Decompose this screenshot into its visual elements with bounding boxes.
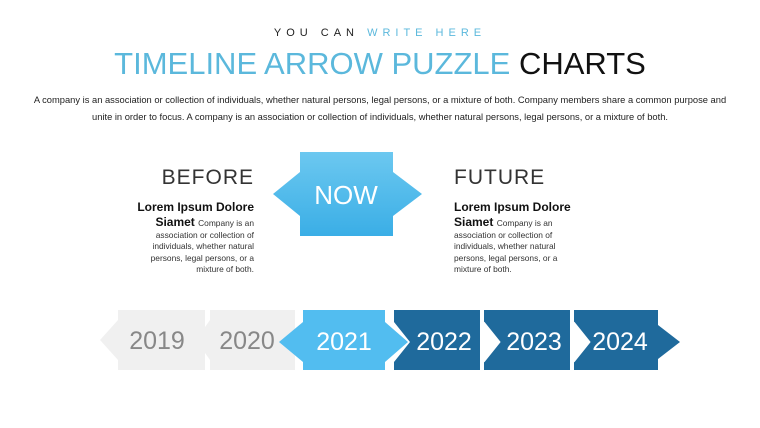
before block: Lorem Ipsum Dolore: [137, 200, 254, 214]
intro paragraph: unite in order to focus. A company is an association or collection of individuals, whether natural persons, legal persons, or a mixture of both.: [92, 112, 668, 122]
title: TIMELINE ARROW PUZZLE CHARTS: [114, 46, 646, 81]
future block: persons, legal persons, or a: [454, 253, 557, 263]
2019: 2019: [129, 327, 185, 355]
future block: association or collection of: [454, 230, 552, 240]
subtitle: YOU CAN WRITE HERE: [274, 27, 486, 39]
intro paragraph: [34, 95, 726, 122]
2020: 2020: [219, 327, 275, 355]
2021: [279, 310, 408, 370]
future block: mixture of both.: [454, 264, 512, 274]
before block: [137, 166, 254, 274]
future block: FUTURE: [454, 166, 545, 189]
2020: [196, 310, 295, 370]
2024: 2024: [592, 328, 648, 356]
2023: [484, 310, 570, 370]
2019: [100, 310, 205, 370]
before block: association or collection of: [156, 230, 254, 240]
future block: [454, 166, 571, 274]
now arrow: NOW: [314, 180, 378, 210]
before block: BEFORE: [162, 166, 254, 189]
2021: 2021: [316, 328, 372, 356]
2022: [394, 310, 480, 370]
intro paragraph: A company is an association or collection of individuals, whether natural persons, legal persons, or a mixture of both. Company members share a common purpose and: [34, 95, 726, 105]
before block: persons, legal persons, or a: [151, 253, 254, 263]
before block: mixture of both.: [196, 264, 254, 274]
before block: Siamet Company is an: [155, 215, 254, 229]
before block: individuals, whether natural: [152, 241, 254, 251]
future block: Siamet Company is an: [454, 215, 553, 229]
future block: Lorem Ipsum Dolore: [454, 200, 571, 214]
future block: individuals, whether natural: [454, 241, 556, 251]
2022: 2022: [416, 328, 472, 356]
2024: [574, 310, 680, 370]
2023: 2023: [506, 328, 562, 356]
